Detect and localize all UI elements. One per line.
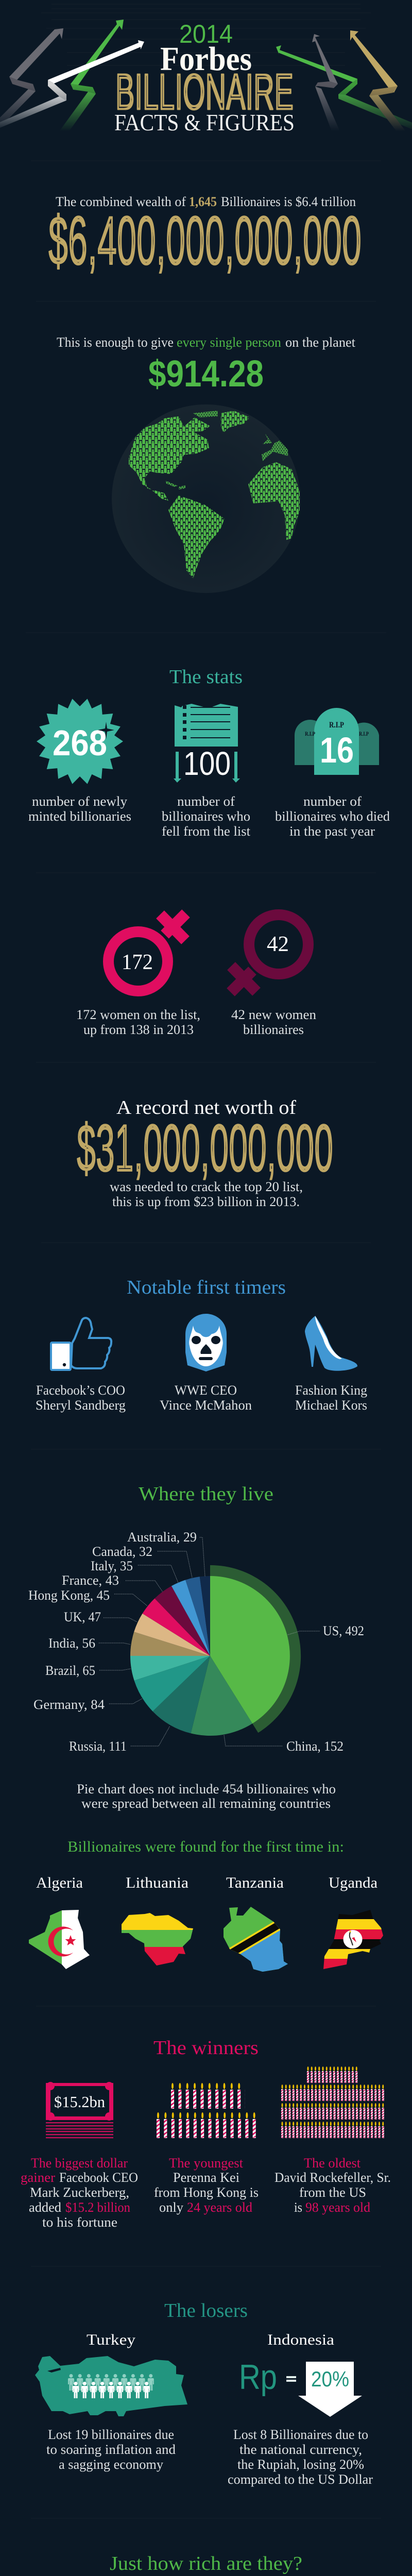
heading: first time countries: Billionaires were found for the first time in: bbox=[67, 1838, 344, 1855]
arrow: grey left bbox=[0, 28, 63, 127]
caption: Sheryl Sandberg: Facebook’s COO bbox=[36, 1383, 125, 1398]
section: per person bbox=[57, 335, 356, 593]
text: every single person: every single person bbox=[177, 335, 281, 350]
text: combined wealth sentence bbox=[56, 194, 356, 209]
map: Algeria bbox=[29, 1877, 90, 1969]
text: the oldest: The oldest bbox=[304, 2156, 361, 2171]
icon: tombstones with 16: R.I.P bbox=[305, 730, 315, 737]
heading: notable first timers: Notable first timers bbox=[127, 1277, 286, 1298]
text: Indonesia caption bbox=[228, 2427, 373, 2487]
pie labels bbox=[28, 1530, 364, 1754]
icon: tombstones with 16 bbox=[295, 708, 379, 775]
map: Lithuania: Lithuania bbox=[126, 1874, 188, 1891]
text: crack the top 20: was needed to crack the top 20 list, bbox=[110, 1179, 303, 1194]
text: biggest dollar gainer: added bbox=[29, 2200, 61, 2215]
text: the youngest: The youngest bbox=[169, 2156, 244, 2171]
caption: 172 women: 172 women on the list, bbox=[76, 1007, 200, 1022]
text: Turkey caption: Lost 19 billionaires due bbox=[48, 2427, 174, 2442]
text: biggest dollar gainer: Mark Zuckerberg, bbox=[30, 2185, 129, 2200]
text: the youngest: from Hong Kong is bbox=[154, 2185, 259, 2200]
text: the youngest: 24 years old bbox=[187, 2200, 252, 2215]
pie labels: Hong Kong, 45 bbox=[28, 1588, 110, 1603]
number: per person amount: $914.28 bbox=[148, 353, 264, 395]
label: Indonesia: Indonesia bbox=[267, 2331, 334, 2348]
caption: newly minted: number of newly bbox=[32, 794, 127, 809]
caption: newly minted bbox=[28, 794, 131, 824]
heading: the winners: The winners bbox=[153, 2037, 259, 2059]
map: Algeria: Algeria bbox=[36, 1874, 83, 1891]
text: Indonesia caption: Lost 8 Billionaires due to bbox=[233, 2427, 368, 2442]
icon: 24 candles bbox=[157, 2083, 260, 2138]
text: the oldest bbox=[274, 2156, 391, 2215]
text: Indonesia caption: the Rupiah, losing 20% bbox=[237, 2457, 364, 2472]
text: combined wealth sentence: The combined wealth of bbox=[56, 194, 186, 209]
text: pie chart note: were spread between all remaining countries bbox=[81, 1796, 331, 1811]
caption: 42 new women: billionaires bbox=[243, 1022, 304, 1037]
section: the winners bbox=[21, 2037, 391, 2230]
icon: right arrows bbox=[276, 30, 412, 131]
pie labels: Russia, 111 bbox=[69, 1739, 127, 1754]
icon: tombstones with 16: R.I.P bbox=[329, 721, 344, 730]
icon: 98 candles bbox=[281, 2066, 386, 2138]
pie labels: France, 43 bbox=[62, 1573, 119, 1588]
label: Turkey: Turkey bbox=[87, 2331, 135, 2348]
caption: died in the past year: billionaires who died bbox=[275, 809, 390, 824]
text: combined wealth sentence: 1,645 bbox=[189, 194, 217, 209]
pie labels: Canada, 32 bbox=[92, 1544, 152, 1559]
caption: fell from the list bbox=[162, 794, 251, 839]
text: biggest dollar gainer: Facebook CEO bbox=[59, 2170, 138, 2185]
text: combined wealth sentence: Billionaires is $6.4 trillion bbox=[221, 194, 356, 209]
title: 2014: 2014 bbox=[179, 20, 233, 48]
icon: rupiah down 20 percent: Rp bbox=[239, 2358, 277, 2397]
icon: 268 starburst: 268 bbox=[53, 723, 107, 763]
caption: Michael Kors bbox=[295, 1383, 367, 1413]
pie labels: Italy, 35 bbox=[91, 1558, 133, 1573]
icon: female symbol 42 bbox=[231, 915, 308, 992]
map: Lithuania bbox=[122, 1877, 193, 1965]
pie labels: Australia, 29 bbox=[127, 1530, 197, 1545]
text: Indonesia caption: the national currency, bbox=[239, 2442, 362, 2457]
text: the oldest: is bbox=[294, 2200, 302, 2215]
pie chart bbox=[130, 1565, 301, 1736]
text: biggest dollar gainer: The biggest dollar bbox=[31, 2156, 128, 2171]
text: crack the top 20: this is up from $23 billion in 2013. bbox=[112, 1194, 300, 1209]
caption: 42 new women: 42 new women bbox=[231, 1007, 316, 1022]
title: Forbes: Forbes bbox=[160, 40, 252, 78]
caption: newly minted: minted billionaries bbox=[28, 809, 131, 824]
arrow: grey right bbox=[312, 34, 338, 127]
map: Tanzania bbox=[224, 1877, 288, 1972]
arrow: green right bbox=[276, 45, 412, 129]
icon: female symbol 42: 42 bbox=[267, 933, 289, 956]
text: the youngest bbox=[154, 2156, 259, 2215]
pie labels: China, 152 bbox=[286, 1739, 344, 1754]
icon: female symbol 172 bbox=[108, 913, 186, 991]
icon: rupiah down 20 percent bbox=[239, 2358, 362, 2417]
heading: the stats: The stats bbox=[169, 666, 243, 688]
text: biggest dollar gainer: $15.2 billion bbox=[65, 2200, 130, 2215]
caption: 172 women: up from 138 in 2013 bbox=[83, 1022, 194, 1037]
caption: fell from the list: billionaires who bbox=[162, 809, 250, 824]
text: crack the top 20 bbox=[110, 1179, 303, 1209]
text: the youngest: only bbox=[159, 2200, 183, 2215]
heading: where they live: Where they live bbox=[139, 1483, 273, 1505]
icon: tombstones with 16: R.I.P bbox=[359, 730, 369, 737]
caption: fell from the list: number of bbox=[177, 794, 235, 809]
heading: just how rich are they: Just how rich are they? bbox=[110, 2553, 302, 2574]
text: every single person bbox=[57, 335, 356, 350]
icon: 268 starburst bbox=[37, 699, 123, 784]
caption: died in the past year: number of bbox=[303, 794, 362, 809]
map: Uganda bbox=[323, 1877, 383, 1969]
text: biggest dollar gainer: to his fortune bbox=[42, 2215, 117, 2230]
caption: died in the past year: in the past year bbox=[289, 824, 375, 839]
section: new countries bbox=[29, 1877, 383, 1972]
arrow: tan right bbox=[350, 30, 406, 131]
text: Indonesia caption: compared to the US Dollar bbox=[228, 2472, 373, 2487]
caption: 42 new women bbox=[231, 1007, 316, 1037]
icon: rupiah down 20 percent: 20% bbox=[311, 2367, 349, 2391]
caption: Michael Kors: Michael Kors bbox=[295, 1398, 367, 1413]
pie labels: Brazil, 65 bbox=[45, 1663, 95, 1678]
icon: list with 100 bbox=[174, 704, 240, 783]
text: every single person: This is enough to give bbox=[57, 335, 174, 350]
heading: the losers: The losers bbox=[164, 2300, 248, 2321]
text: the oldest: from the US bbox=[299, 2185, 366, 2200]
caption: fell from the list: fell from the list bbox=[162, 824, 251, 839]
icon: left arrows bbox=[0, 20, 144, 131]
text: Turkey caption: a sagging economy bbox=[59, 2457, 163, 2472]
section: record net worth bbox=[77, 1097, 333, 1209]
heading: a record net worth of: A record net worth of bbox=[116, 1097, 296, 1118]
section: the stats bbox=[28, 666, 390, 839]
section: notable first timers bbox=[36, 1277, 367, 1413]
arrow: green left bbox=[59, 20, 124, 131]
caption: died in the past year bbox=[275, 794, 390, 839]
caption: 172 women bbox=[76, 1007, 200, 1037]
text: Turkey caption bbox=[46, 2427, 176, 2472]
map: Turkey with people bbox=[35, 2356, 187, 2416]
section: where they live bbox=[28, 1483, 364, 1855]
caption: Vince McMahon bbox=[160, 1383, 252, 1413]
map: Tanzania: Tanzania bbox=[226, 1874, 284, 1891]
title: Facts and Figures: FACTS & FIGURES bbox=[114, 110, 295, 135]
text: pie chart note bbox=[77, 1782, 336, 1811]
caption: Sheryl Sandberg bbox=[36, 1383, 126, 1413]
text: pie chart note: Pie chart does not include 454 billionaires who bbox=[77, 1782, 336, 1797]
section: women billionaires bbox=[76, 913, 316, 1037]
section: the losers bbox=[35, 2300, 373, 2487]
icon: list with 100: 100 bbox=[183, 745, 231, 782]
arrow: white left bbox=[0, 40, 144, 128]
caption: Sheryl Sandberg: Sheryl Sandberg bbox=[36, 1398, 126, 1413]
pie labels: India, 56 bbox=[48, 1636, 95, 1651]
text: the oldest: 98 years old bbox=[305, 2200, 370, 2215]
icon: thumbs up bbox=[51, 1318, 111, 1370]
icon: banknote stack bbox=[46, 2082, 113, 2138]
text: the youngest: Perenna Kei bbox=[173, 2170, 239, 2185]
caption: Vince McMahon: Vince McMahon bbox=[160, 1398, 252, 1413]
text: biggest dollar gainer: gainer bbox=[21, 2170, 55, 2185]
text: the oldest: David Rockefeller, Sr. bbox=[274, 2170, 391, 2185]
text: Turkey caption: to soaring inflation and bbox=[46, 2442, 176, 2457]
icon: tombstones with 16: 16 bbox=[320, 730, 354, 770]
icon: globe of people bbox=[112, 404, 300, 593]
icon: female symbol 172: 172 bbox=[122, 951, 153, 974]
icon: wrestling mask bbox=[185, 1314, 227, 1371]
caption: Vince McMahon: WWE CEO bbox=[175, 1383, 237, 1398]
caption: Michael Kors: Fashion King bbox=[295, 1383, 367, 1398]
section: combined wealth bbox=[48, 194, 362, 279]
header: title and arrows bbox=[0, 20, 412, 135]
map: Uganda: Uganda bbox=[329, 1874, 377, 1891]
pie labels: Germany, 84 bbox=[33, 1697, 105, 1712]
icon: high heel shoe bbox=[305, 1316, 357, 1371]
text: every single person: on the planet bbox=[285, 335, 356, 350]
icon: banknote stack: $15.2bn bbox=[54, 2093, 105, 2111]
text: biggest dollar gainer bbox=[21, 2156, 138, 2230]
pie labels: US, 492 bbox=[323, 1623, 364, 1638]
pie labels: UK, 47 bbox=[64, 1609, 101, 1624]
pie leader lines bbox=[99, 1537, 320, 1746]
